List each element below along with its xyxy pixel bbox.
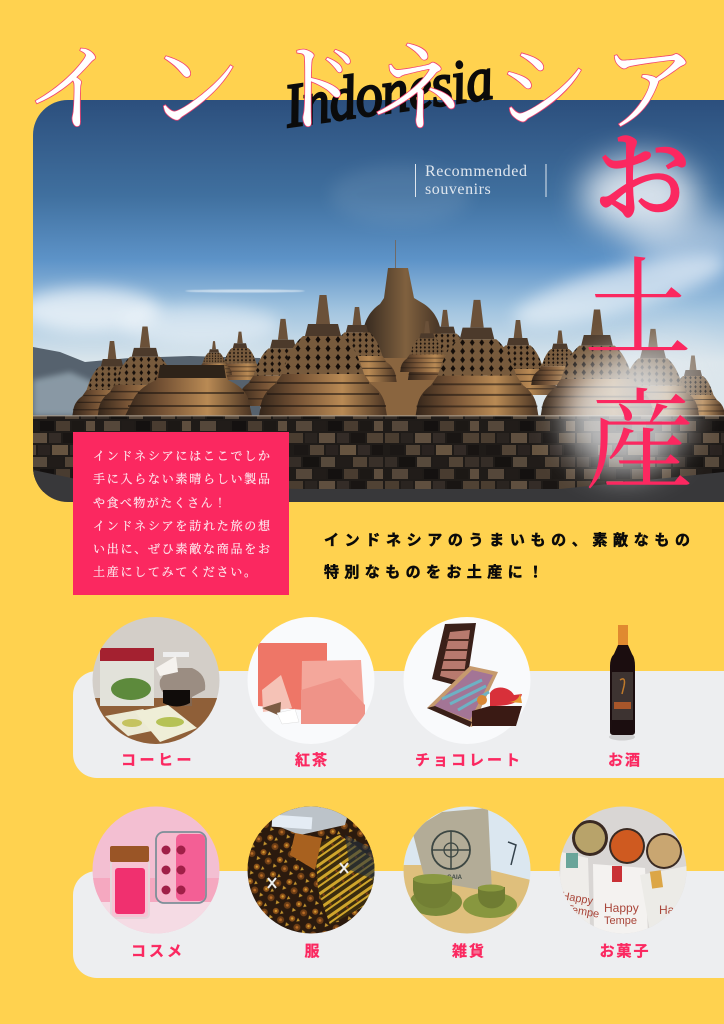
paved ground	[33, 470, 724, 502]
photo: snacks	[559, 806, 687, 934]
photo: homeware	[403, 806, 531, 934]
tagline	[324, 532, 690, 581]
panel: goods row	[73, 871, 724, 978]
distant mountains	[33, 347, 260, 416]
main title: Indonesia in katakana: シ	[494, 36, 590, 143]
main title: Indonesia in katakana: ネ	[370, 36, 466, 143]
panel: food and drink row	[73, 671, 724, 778]
vertical title: souvenirs: お	[593, 126, 691, 234]
photo: snacks: Happy	[560, 890, 594, 908]
stupas	[72, 240, 724, 416]
pink intro text box	[73, 432, 289, 595]
item labels	[121, 752, 651, 960]
pink intro text box: や食べ物がたくさん！	[93, 495, 226, 510]
Indonesia script title: Indonesia	[279, 43, 497, 141]
item labels: 雑貨	[452, 942, 486, 960]
item labels: チョコレート	[415, 752, 523, 769]
sky	[33, 100, 724, 420]
photo: chocolate	[404, 617, 530, 744]
photo: homeware: GAIA	[447, 875, 463, 881]
pink intro text box: 手に入らない素晴らしい製品	[93, 471, 270, 486]
vertical title: souvenirs: 土	[584, 252, 692, 371]
photo: snacks: Tempe	[604, 915, 637, 927]
subtitle: recommended souvenirs: Recommended	[425, 163, 528, 180]
main title: Indonesia in katakana: イ	[24, 36, 120, 143]
item labels: コーヒー	[121, 752, 195, 769]
item labels: お酒	[608, 752, 642, 769]
main title: Indonesia in katakana	[24, 36, 697, 143]
photo: liquor bottle	[609, 625, 635, 740]
subtitle: recommended souvenirs: souvenirs	[425, 181, 491, 198]
pink intro text box: 土産にしてみてください。	[93, 564, 256, 579]
photo: batik clothes	[247, 806, 375, 934]
main title: Indonesia in katakana: ド	[267, 36, 363, 143]
photo: cosmetics	[92, 806, 220, 936]
pink intro text box: インドネシアにはここでしか	[93, 449, 270, 463]
tagline: インドネシアのうまいもの、素敵なもの	[324, 532, 690, 549]
pink intro text box: インドネシアを訪れた旅の想	[93, 518, 271, 533]
photo: coffee	[92, 617, 220, 748]
item labels: コスメ	[131, 943, 185, 960]
hero photo: Borobudur temple	[20, 100, 724, 502]
stone wall	[33, 416, 724, 492]
tagline: 特別なものをお土産に！	[324, 563, 543, 581]
item labels: 服	[304, 943, 320, 960]
vertical title: souvenirs	[584, 126, 695, 504]
clouds	[20, 157, 724, 345]
photo: snacks: Happy	[604, 901, 639, 915]
photo: snacks: Ha	[659, 903, 675, 917]
photo: snacks: Tempe	[565, 903, 600, 921]
main title: Indonesia in katakana: ア	[601, 36, 697, 143]
vertical title: souvenirs: 産	[585, 382, 695, 504]
pink intro text box: い出に、ぜひ素敵な商品をお	[93, 541, 270, 556]
item labels: 紅茶	[295, 752, 329, 769]
photo: black tea	[248, 617, 374, 744]
item labels: お菓子	[599, 943, 651, 960]
main title: Indonesia in katakana: ン	[146, 36, 242, 143]
subtitle: recommended souvenirs	[416, 163, 546, 198]
mist	[563, 355, 687, 475]
